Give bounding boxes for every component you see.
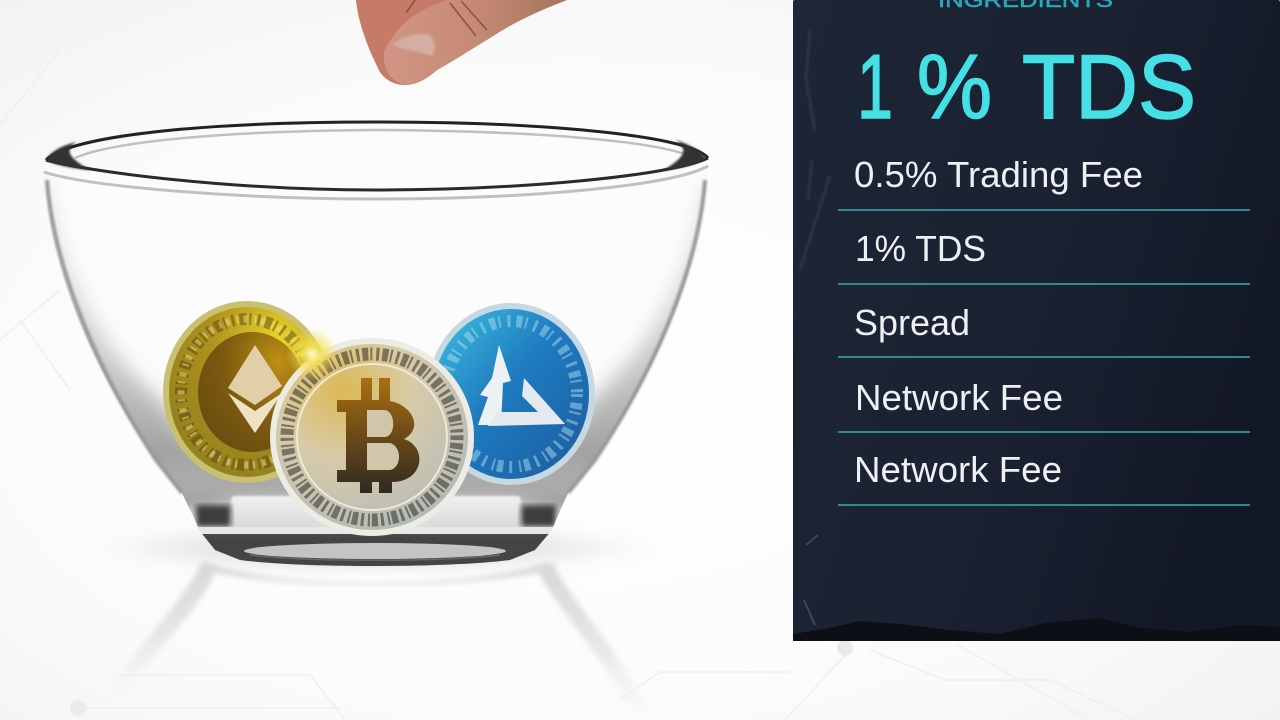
glass bowl (30, 122, 720, 569)
list item: 1% TDS (855, 228, 986, 269)
highlight: 1% TDS: % (917, 37, 992, 138)
highlight: 1% TDS (857, 37, 1196, 138)
list item: Network Fee (854, 449, 1062, 490)
highlight: 1% TDS: TDS (1022, 37, 1196, 138)
coin: bitcoin (270, 328, 474, 536)
panel: ingredients (793, 0, 1280, 641)
list item: Network Fee (855, 377, 1063, 418)
hand (356, 0, 567, 85)
coin: ethereum (163, 301, 331, 483)
list item: Spread (854, 302, 970, 343)
bowl shadow and reflection (95, 524, 655, 712)
highlight: 1% TDS: 1 (857, 37, 893, 138)
coin: blue (427, 303, 595, 485)
list item: 0.5% Trading Fee (854, 154, 1143, 195)
